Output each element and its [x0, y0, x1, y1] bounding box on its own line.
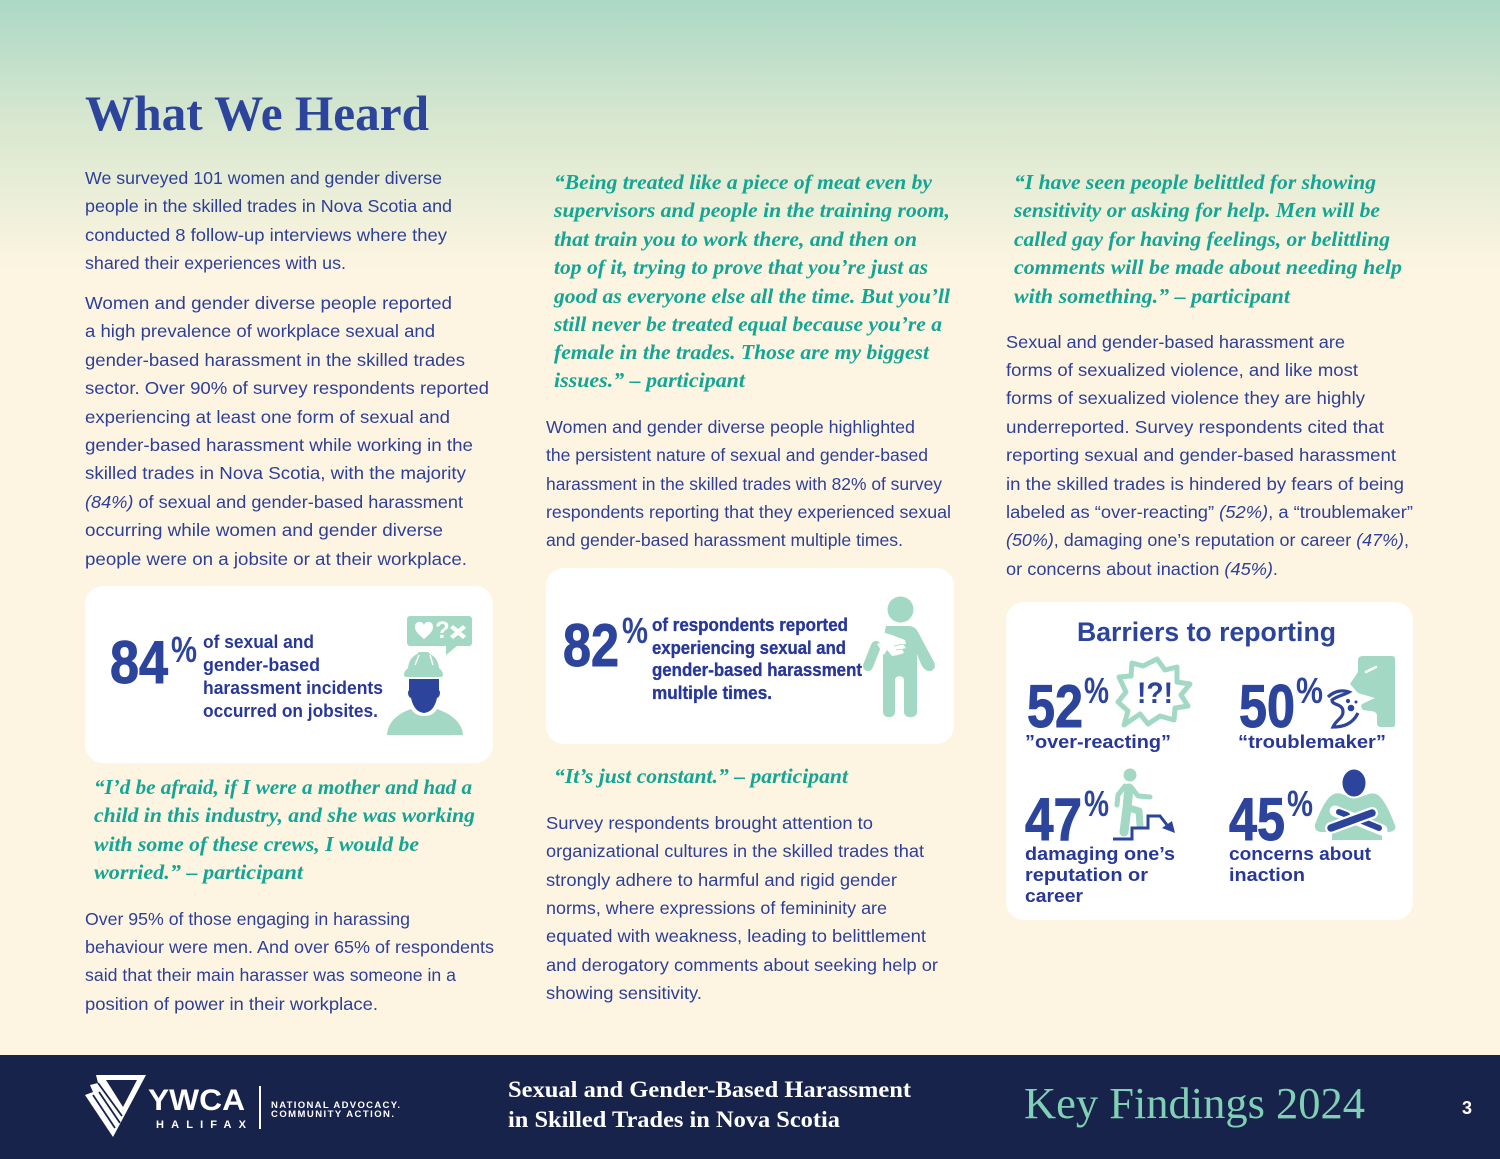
text block: persistent nature: the persistent nature of sexual and gender-based	[546, 445, 928, 465]
text block: organizational cultures: norms, where expressions of femininity are	[546, 898, 887, 918]
icon: construction worker with speech bubble	[387, 616, 472, 735]
text block: underreporting: Sexual and gender-based harassment are	[1006, 332, 1345, 352]
text block: underreporting: or concerns about inaction (45%).	[1006, 559, 1278, 579]
icon: construction worker with speech bubble: ?	[435, 617, 450, 644]
stat: 47% damaging reputation: reputation or	[1025, 864, 1148, 885]
quote: piece of meat: good as everyone else all the time. But you’ll	[553, 284, 950, 308]
text block: underreporting: (50%), damaging one’s reputation or career (47%),	[1006, 530, 1409, 550]
text block: survey intro: shared their experiences with us.	[85, 253, 346, 273]
stat: 52% over-reacting	[1025, 659, 1190, 752]
quote: piece of meat: top of it, trying to prove that you’re just as	[554, 255, 928, 279]
report name: Sexual and Gender-Based Harassment	[508, 1077, 911, 1102]
stat: 45% concerns about inaction: inaction	[1229, 864, 1305, 885]
text block: harassers	[85, 909, 494, 1014]
quote: afraid	[94, 775, 475, 884]
stat: 47% damaging reputation: damaging one’s	[1025, 843, 1175, 864]
stat: 45% concerns about inaction: concerns about	[1229, 843, 1371, 864]
text block: prevalence: experiencing at least one form of sexual and	[85, 407, 450, 427]
callout: 84% on jobsites	[85, 586, 493, 763]
text block: prevalence	[85, 293, 489, 569]
text block: underreporting	[1006, 332, 1413, 579]
quote: afraid: “I’d be afraid, if I were a mother and had a	[94, 775, 472, 799]
text block: organizational cultures	[546, 813, 938, 1003]
text block: persistent nature: and gender-based harassment multiple times.	[546, 530, 903, 550]
text block: underreporting: forms of sexualized violence, and like most	[1006, 360, 1358, 380]
text block: underreporting: underreported. Survey respondents cited that	[1006, 417, 1384, 437]
text block: organizational cultures: strongly adhere to harmful and rigid gender	[546, 870, 897, 890]
text block: persistent nature: Women and gender diverse people highlighted	[546, 417, 915, 437]
quote: piece of meat: that train you to work there, and then on	[554, 227, 917, 251]
title: What We Heard	[85, 85, 429, 141]
logo: YWCA Halifax: YWCA	[148, 1084, 245, 1117]
text block: survey intro: conducted 8 follow-up interviews where they	[85, 225, 447, 245]
quote: belittled: sensitivity or asking for help. Men will be	[1013, 198, 1380, 222]
text block: organizational cultures: showing sensitivity.	[546, 983, 702, 1003]
page number: 3	[1462, 1098, 1472, 1118]
text block: prevalence: skilled trades in Nova Scotia, with the majority	[85, 463, 466, 483]
quote: belittled: with something.” – participant	[1014, 284, 1291, 308]
quote: piece of meat: “Being treated like a piece of meat even by	[554, 170, 932, 194]
text block: survey intro: people in the skilled trades in Nova Scotia and	[85, 196, 452, 216]
stat: 52% over-reacting: 52	[1027, 673, 1083, 740]
text block: organizational cultures: and derogatory comments about seeking help or	[546, 955, 938, 975]
quote: belittled: “I have seen people belittled for showing	[1014, 170, 1376, 194]
text block: organizational cultures: organizational cultures in the skilled trades that	[546, 841, 924, 861]
stat: 50% troublemaker: “troublemaker”	[1238, 731, 1386, 752]
logo: YWCA Halifax: HALIFAX	[156, 1119, 247, 1131]
quote: afraid: worried.” – participant	[94, 860, 304, 884]
stat: 45% concerns about inaction	[1229, 768, 1395, 885]
text block: survey intro	[85, 168, 452, 273]
callout: 84% on jobsites: of sexual and	[203, 631, 314, 652]
text block: underreporting: labeled as “over-reacting” (52%), a “troublemaker”	[1006, 502, 1413, 522]
report name	[508, 1077, 911, 1132]
callout: 82% multiple times: %	[622, 610, 648, 651]
callout: 82% multiple times: gender-based harassment	[652, 659, 862, 680]
footer band	[0, 1055, 1500, 1159]
key findings label: Key Findings 2024	[1024, 1079, 1365, 1128]
text block: prevalence: gender-based harassment in the skilled trades	[85, 350, 465, 370]
text block: prevalence: people were on a jobsite or at their workplace.	[85, 549, 467, 569]
icon: person with crossed arms	[1315, 768, 1395, 840]
logo: YWCA Halifax	[85, 1075, 400, 1137]
text block: persistent nature: harassment in the skilled trades with 82% of survey	[546, 474, 942, 494]
callout: 82% multiple times: experiencing sexual and	[652, 637, 846, 658]
icon: head speaking	[1328, 656, 1395, 727]
quote: belittled: called gay for having feelings, or belittling	[1014, 227, 1390, 251]
panel: column 1	[85, 168, 494, 1014]
callout: 84% on jobsites: gender-based	[203, 654, 320, 675]
quote: afraid: child in this industry, and she was working	[94, 803, 475, 827]
stat: 45% concerns about inaction: 45	[1229, 786, 1285, 853]
quote: piece of meat: supervisors and people in the training room,	[553, 198, 950, 222]
quote: afraid: with some of these crews, I would be	[94, 832, 419, 856]
stat: 50% troublemaker	[1238, 656, 1395, 752]
quote: piece of meat: still never be treated equal because you’re a	[553, 312, 942, 336]
logo: YWCA Halifax: NATIONAL ADVOCACY.	[271, 1100, 400, 1111]
callout: 82% multiple times: 82	[563, 612, 619, 679]
icon: starburst	[1118, 659, 1190, 725]
icon: climbing figure with falling arrow	[1113, 768, 1175, 839]
callout: 84% on jobsites: 84	[110, 629, 169, 696]
report name: in Skilled Trades in Nova Scotia	[508, 1107, 841, 1132]
text block: underreporting: in the skilled trades is hindered by fears of being	[1006, 474, 1404, 494]
quote: belittled: comments will be made about needing help	[1014, 255, 1402, 279]
text block: prevalence: a high prevalence of workplace sexual and	[85, 321, 435, 341]
text block: organizational cultures: Survey respondents brought attention to	[546, 813, 873, 833]
stat: 45% concerns about inaction: %	[1287, 783, 1313, 824]
quote: belittled	[1013, 170, 1402, 308]
text block: harassers: said that their main harasser was someone in a	[85, 965, 456, 985]
callout: 82% multiple times	[546, 568, 954, 744]
text block: harassers: position of power in their workplace.	[85, 994, 378, 1014]
text block: prevalence: (84%) of sexual and gender-based harassment	[85, 492, 463, 512]
stat: 47% damaging reputation	[1025, 768, 1175, 906]
text block: harassers: behaviour were men. And over 65% of respondents	[85, 937, 494, 957]
text block: harassers: Over 95% of those engaging in harassing	[85, 909, 410, 929]
stat: 50% troublemaker: %	[1296, 670, 1323, 711]
text block: prevalence: Women and gender diverse people reported	[85, 293, 452, 313]
quote: constant: “It’s just constant.” – participant	[554, 764, 849, 788]
panel: column 3	[1006, 170, 1413, 920]
quote: piece of meat	[553, 170, 950, 392]
text block: persistent nature	[546, 417, 951, 550]
text block: prevalence: sector. Over 90% of survey respondents reported	[85, 378, 489, 398]
text block: organizational cultures: equated with weakness, leading to belittlement	[546, 926, 926, 946]
stat: 47% damaging reputation: career	[1025, 885, 1083, 906]
quote: piece of meat: female in the trades. Those are my biggest	[554, 340, 930, 364]
text block: persistent nature: respondents reporting that they experienced sexual	[546, 502, 951, 522]
text block: prevalence: gender-based harassment while working in the	[85, 435, 473, 455]
stat: 52% over-reacting: ”over-reacting”	[1025, 731, 1171, 752]
icon: person with hand on shoulder	[868, 596, 935, 717]
panel: column 2	[546, 170, 954, 1003]
callout: 84% on jobsites: occurred on jobsites.	[203, 700, 378, 721]
stat: 47% damaging reputation: 47	[1025, 786, 1082, 853]
panel: barriers to reporting	[1006, 602, 1413, 920]
logo: YWCA Halifax: COMMUNITY ACTION.	[271, 1109, 394, 1120]
callout: 84% on jobsites: harassment incidents	[203, 677, 383, 698]
icon: starburst: !?!	[1137, 677, 1173, 710]
text block: survey intro: We surveyed 101 women and gender diverse	[85, 168, 442, 188]
text block: underreporting: forms of sexualized violence they are highly	[1006, 388, 1365, 408]
stat: 52% over-reacting: %	[1084, 670, 1109, 711]
text block: underreporting: reporting sexual and gender-based harassment	[1006, 445, 1396, 465]
heading: barriers to reporting: Barriers to reporting	[1077, 617, 1336, 647]
callout: 82% multiple times: of respondents reported	[652, 614, 848, 635]
quote: piece of meat: issues.” – participant	[554, 368, 746, 392]
stat: 50% troublemaker: 50	[1239, 673, 1295, 740]
callout: 84% on jobsites: %	[171, 629, 197, 670]
callout: 82% multiple times: multiple times.	[652, 682, 772, 703]
text block: prevalence: occurring while women and gender diverse	[85, 520, 443, 540]
stat: 47% damaging reputation: %	[1084, 783, 1109, 824]
